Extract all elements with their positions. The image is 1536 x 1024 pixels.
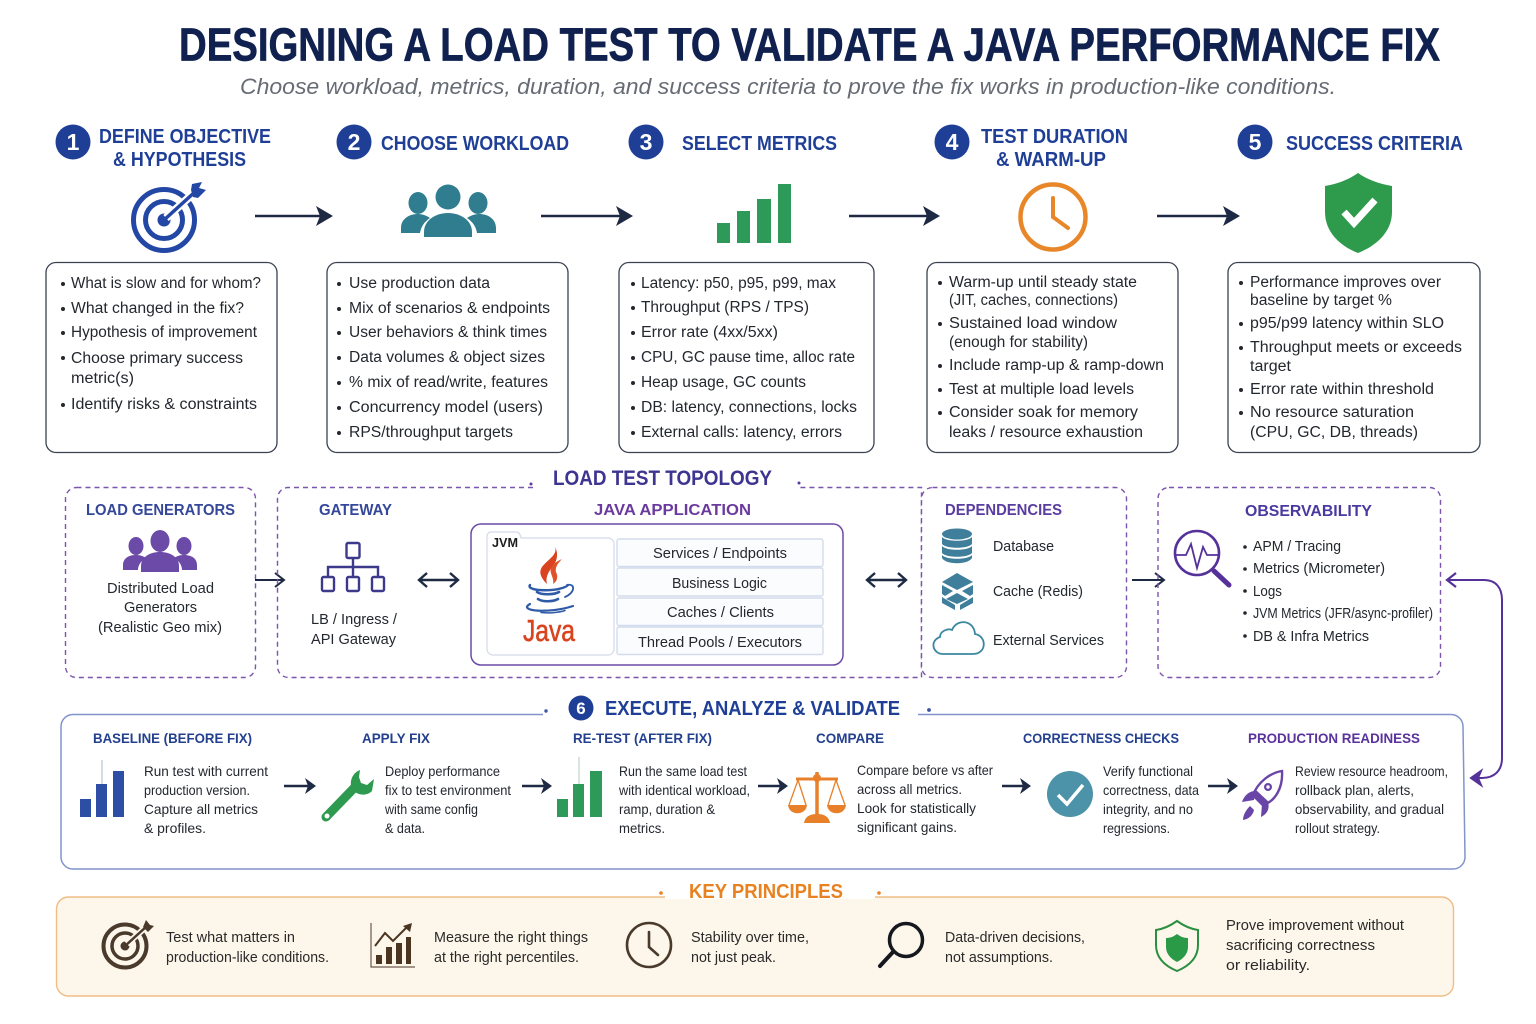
panel: dependencies: Database [993, 539, 1054, 555]
panel: dependencies: External Services [993, 633, 1104, 649]
arrow: java to dependencies [867, 573, 906, 587]
panel: metrics bullets: CPU, GC pause time, alloc rate [641, 349, 855, 366]
arrow: re-test to compare [758, 778, 788, 794]
stage: production readiness: observability, and gradual [1295, 802, 1444, 817]
stage: production readiness: rollout strategy. [1295, 821, 1380, 836]
stage: re-test: Run the same load test [619, 764, 747, 779]
icon: database [942, 528, 972, 563]
panel: workload bullets: RPS/throughput targets [349, 424, 513, 441]
stage: production readiness: rollback plan, alerts, [1295, 783, 1414, 798]
stage: apply fix: with same config [384, 802, 478, 817]
stage: apply fix [324, 730, 511, 836]
stage: baseline: BASELINE (BEFORE FIX) [93, 730, 252, 746]
panel: dependencies: Cache (Redis) [993, 584, 1083, 600]
stage: compare: Look for statistically [857, 801, 976, 816]
principle: stability over time: Stability over time, [691, 930, 809, 946]
heading: load test topology: LOAD TEST TOPOLOGY [553, 467, 772, 490]
panel: workload bullets: Mix of scenarios & endpoints [349, 300, 550, 317]
panel: gateway and java application frame: GATEWAY [319, 502, 392, 519]
icon: brown target [104, 920, 154, 968]
icon: wrench [324, 770, 374, 818]
panel: success bullets: Error rate within threshold [1250, 381, 1434, 398]
panel: duration bullets: Warm-up until steady state [949, 274, 1137, 291]
stage: baseline [80, 730, 268, 836]
panel: observability: OBSERVABILITY [1245, 503, 1372, 520]
icon: cache cubes [942, 573, 973, 610]
panel: load generators: Distributed Load [107, 581, 214, 597]
stage: baseline: production version. [144, 783, 250, 798]
panel: observability: APM / Tracing [1253, 539, 1341, 555]
panel: workload bullets: User behaviors & think times [349, 324, 547, 341]
step 6 badge [568, 696, 594, 720]
panel: workload bullets: Concurrency model (users) [349, 399, 543, 416]
panel: metrics bullets [619, 262, 874, 452]
panel: workload bullets: Use production data [349, 275, 490, 292]
panel: java application box: Thread Pools / Executors [638, 635, 802, 651]
principle: data-driven decisions: Data-driven decisions, [945, 930, 1085, 946]
step 2 number badge [336, 124, 372, 160]
stage: correctness checks: CORRECTNESS CHECKS [1023, 730, 1179, 746]
panel: objective bullets: Identify risks & constraints [71, 396, 257, 413]
step 1 number badge [56, 124, 90, 160]
stage: correctness checks: correctness, data [1103, 783, 1199, 798]
arrow: compare to checks [1002, 778, 1031, 794]
stage: re-test: RE-TEST (AFTER FIX) [573, 730, 712, 746]
arrow: generators to gateway [255, 573, 284, 587]
panel: observability: Logs [1253, 584, 1282, 600]
step 4 number badge [934, 124, 970, 160]
icon: target with arrow [134, 182, 206, 250]
step 1: define objective [46, 124, 277, 452]
panel: objective bullets: What changed in the fix? [71, 300, 244, 317]
panel: duration bullets: leaks / resource exhaustion [949, 424, 1143, 441]
arrow 2 to 3 [541, 206, 633, 226]
panel: key principles [56, 881, 1454, 996]
step 2 heading: CHOOSE WORKLOAD [381, 133, 569, 155]
arrow: gateway to java [419, 573, 458, 587]
panel: dependencies: DEPENDENCIES [945, 502, 1062, 519]
key principles heading: KEY PRINCIPLES [689, 881, 843, 903]
step 6 badge: 6 [576, 699, 586, 718]
panel: duration bullets: Test at multiple load levels [949, 381, 1134, 398]
panel: objective bullets: What is slow and for whom? [71, 275, 261, 292]
step 1 heading: & HYPOTHESIS [113, 149, 246, 171]
principle: stability over time [627, 923, 809, 967]
panel: success bullets: baseline by target % [1250, 292, 1392, 309]
principle: test what matters: Test what matters in [166, 930, 295, 946]
step 4 heading: & WARM-UP [996, 149, 1106, 171]
panel: workload bullets: Data volumes & object sizes [349, 349, 545, 366]
stage: apply fix: fix to test environment [385, 783, 511, 798]
stage: compare: Compare before vs after [857, 763, 993, 778]
arrow: fix to re-test [522, 778, 552, 794]
panel: JVM [487, 532, 614, 655]
panel: metrics bullets: Heap usage, GC counts [641, 374, 806, 391]
principle: prove improvement: sacrificing correctness [1226, 938, 1375, 954]
panel: duration bullets: (JIT, caches, connections) [949, 292, 1118, 309]
panel: duration bullets: Sustained load window [949, 315, 1118, 332]
icon: magnifier with pulse [1175, 531, 1229, 585]
panel: metrics bullets: External calls: latency, errors [641, 424, 842, 441]
icon: purple people [123, 530, 197, 572]
panel: success bullets: Performance improves over [1250, 274, 1441, 291]
stage: compare: across all metrics. [857, 782, 962, 797]
java wordmark: Java [523, 613, 576, 648]
panel: success bullets: target [1250, 358, 1292, 375]
panel: observability: Metrics (Micrometer) [1253, 561, 1385, 577]
stage: baseline: & profiles. [144, 821, 206, 836]
stage: correctness checks: regressions. [1103, 821, 1170, 836]
principle: data-driven decisions [880, 924, 1085, 966]
step 2 number badge: 2 [348, 129, 360, 155]
panel: java application box: Services / Endpoints [653, 546, 787, 562]
stage: baseline: Capture all metrics [144, 802, 258, 817]
arrow 3 to 4 [849, 206, 940, 226]
stage: compare: COMPARE [816, 730, 884, 746]
panel: duration bullets: Include ramp-up & ramp-down [949, 357, 1164, 374]
panel: metrics bullets: Throughput (RPS / TPS) [641, 299, 809, 316]
panel: duration bullets: (enough for stability) [949, 334, 1088, 351]
panel: gateway and java application frame: JAVA APPLICATION [594, 502, 751, 519]
panel: workload bullets: % mix of read/write, features [349, 374, 548, 391]
stage: compare: significant gains. [857, 820, 957, 835]
stage: re-test: ramp, duration & [619, 802, 715, 817]
step 4 heading: TEST DURATION [981, 126, 1128, 148]
java layers [617, 539, 823, 654]
panel: success bullets [1228, 262, 1480, 452]
principle: prove improvement [1156, 918, 1404, 974]
step 3: select metrics [619, 124, 874, 452]
panel: java application box [471, 524, 843, 665]
stage: apply fix: APPLY FIX [362, 730, 431, 746]
icon: cloud [933, 622, 984, 654]
principle: test what matters: production-like conditions. [166, 950, 329, 966]
stage: re-test: metrics. [619, 821, 665, 836]
step 5: success criteria [1228, 124, 1480, 452]
arrow 4 to 5 [1157, 206, 1240, 226]
panel: observability: JVM Metrics (JFR/async-profiler) [1253, 606, 1433, 622]
principle: prove improvement: Prove improvement without [1226, 918, 1404, 934]
panel: duration bullets: Consider soak for memory [949, 404, 1138, 421]
stage: apply fix: & data. [385, 821, 425, 836]
panel: load generators: LOAD GENERATORS [86, 502, 235, 519]
principle: measure the right things: Measure the right things [434, 930, 588, 946]
icon: outline shield [1156, 921, 1198, 971]
step 4 number badge: 4 [946, 129, 959, 155]
arrow: baseline to fix [284, 778, 316, 794]
stage: correctness checks: integrity, and no [1103, 802, 1193, 817]
icon: growth chart [371, 923, 415, 967]
icon: people [401, 184, 496, 237]
icon: rocket [1242, 771, 1282, 820]
step 6 heading: EXECUTE, ANALYZE & VALIDATE [605, 698, 900, 720]
step 5 number badge: 5 [1249, 129, 1262, 155]
step 4: test duration [927, 124, 1178, 452]
arrow 1 to 2 [255, 206, 333, 226]
step 3 number badge: 3 [640, 129, 652, 155]
step 1 heading [99, 126, 271, 171]
icon: java steam and cup [527, 547, 573, 613]
feedback arrow: validate to observability [1447, 573, 1502, 785]
principle: measure the right things [371, 923, 588, 967]
panel: dependencies [922, 488, 1126, 678]
panel: observability: DB & Infra Metrics [1253, 629, 1369, 645]
principle: measure the right things: at the right percentiles. [434, 950, 579, 966]
panel: success bullets: (CPU, GC, DB, threads) [1250, 424, 1418, 441]
stage: apply fix: Deploy performance [385, 764, 500, 779]
panel: load generators: Generators [124, 600, 197, 616]
panel: success bullets: Throughput meets or exceeds [1250, 339, 1462, 356]
step 1 heading: DEFINE OBJECTIVE [99, 126, 271, 148]
icon: check circle [1047, 771, 1093, 817]
panel: load generators: (Realistic Geo mix) [98, 620, 222, 636]
arrow: dependencies to observability [1132, 573, 1164, 587]
icon: green bars [557, 757, 602, 817]
panel: objective bullets: Choose primary success [71, 350, 243, 367]
stage: baseline: Run test with current [144, 764, 268, 779]
principle: stability over time: not just peak. [691, 950, 776, 966]
panel: observability [1158, 488, 1440, 678]
panel: java application box: Caches / Clients [667, 605, 774, 621]
stage: re-test: with identical workload, [618, 783, 750, 798]
icon: network tree [322, 543, 384, 591]
panel: java application box: Business Logic [672, 576, 767, 592]
panel: success bullets: No resource saturation [1250, 404, 1414, 421]
panel: success bullets: p95/p99 latency within SLO [1250, 315, 1444, 332]
principle: data-driven decisions: not assumptions. [945, 950, 1053, 966]
icon: orange clock [1020, 184, 1086, 250]
panel: workload bullets [327, 262, 568, 452]
step 4 heading [981, 126, 1128, 171]
arrow: checks to readiness [1208, 778, 1238, 794]
stage: production readiness: Review resource headroom, [1295, 764, 1448, 779]
panel: objective bullets: metric(s) [71, 370, 134, 387]
icon: green bar chart [717, 184, 791, 243]
panel: execute, analyze and validate [61, 696, 1465, 869]
icon: green shield check [1325, 173, 1392, 253]
step 2: choose workload [327, 124, 569, 452]
stage: re-test [557, 730, 750, 836]
panel: gateway and java application frame: API Gateway [311, 632, 397, 648]
icon: balance scale [788, 772, 846, 823]
stage: compare [788, 730, 993, 835]
panel: load generators [66, 488, 256, 678]
panel: metrics bullets: Latency: p50, p95, p99, max [641, 275, 836, 292]
panel: duration bullets [927, 262, 1178, 452]
step 3 number badge [628, 124, 664, 160]
icon: blue bars [80, 760, 124, 817]
panel: gateway and java application frame: LB / Ingress / [311, 612, 398, 628]
panel: objective bullets [46, 262, 277, 452]
principle: test what matters [104, 920, 329, 968]
step 1 number badge: 1 [67, 129, 80, 155]
stage: production readiness [1242, 730, 1448, 836]
panel: metrics bullets: DB: latency, connections, locks [641, 399, 857, 416]
principle: prove improvement: or reliability. [1226, 958, 1310, 974]
stage: correctness checks: Verify functional [1103, 764, 1193, 779]
subtitle: Choose workload, metrics, duration, and success criteria to prove the fix works in production-like conditions. [240, 74, 1336, 99]
panel: JVM: JVM [492, 536, 518, 550]
panel: objective bullets: Hypothesis of improvement [71, 324, 258, 341]
step 3 heading: SELECT METRICS [682, 133, 837, 155]
panel: metrics bullets: Error rate (4xx/5xx) [641, 324, 778, 341]
step 5 heading: SUCCESS CRITERIA [1286, 133, 1463, 155]
panel: gateway and java application frame [278, 482, 922, 678]
icon: dark clock [627, 923, 671, 967]
icon: magnifier [880, 924, 922, 966]
stage: correctness checks [1023, 730, 1199, 836]
step 5 number badge [1238, 124, 1272, 160]
stage: production readiness: PRODUCTION READINESS [1248, 730, 1420, 746]
